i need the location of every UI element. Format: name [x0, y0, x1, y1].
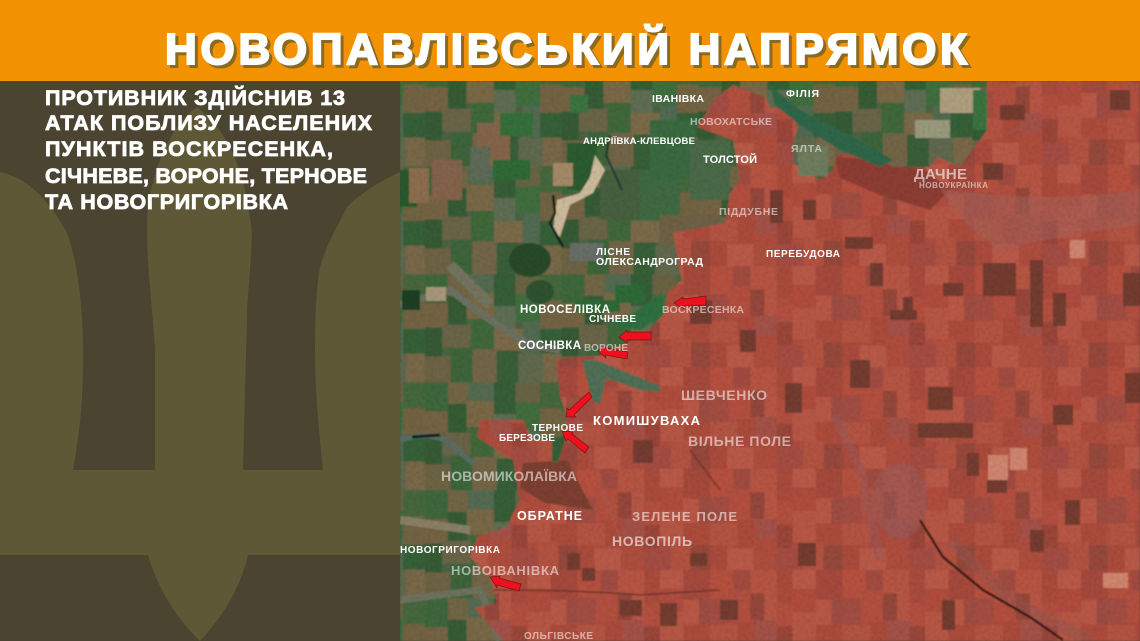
label: Толстой: ТОЛСТОЙ	[703, 153, 757, 166]
label: Березове: БЕРЕЗОВЕ	[499, 433, 555, 444]
text block: attack summary	[45, 85, 373, 214]
label: Філія: ФІЛІЯ	[786, 88, 819, 100]
label: Новоукраїнка: НОВОУКРАЇНКА	[919, 181, 988, 190]
text block: attack summary: ПРОТИВНИК ЗДІЙСНИВ 13	[45, 85, 345, 110]
label: Олександроград: ОЛЕКСАНДРОГРАД	[596, 256, 704, 268]
label: Соснівка: СОСНІВКА	[518, 340, 581, 352]
map imagery	[400, 81, 1140, 641]
label: Новоіванівка: НОВОІВАНІВКА	[451, 563, 560, 578]
arrow: Voskresenka	[674, 296, 706, 309]
satellite map	[400, 81, 1140, 641]
label: Дачне: ДАЧНЕ	[914, 166, 967, 183]
text block: attack summary: СІЧНЕВЕ, ВОРОНЕ, ТЕРНОВЕ	[45, 164, 367, 188]
label: Тернове: ТЕРНОВЕ	[532, 423, 583, 434]
label: Новомиколаївка: НОВОМИКОЛАЇВКА	[441, 468, 577, 484]
label: Перебудова: ПЕРЕБУДОВА	[766, 249, 840, 260]
label: Іванівка: ІВАНІВКА	[652, 93, 704, 105]
text block: attack summary: ПУНКТІВ ВОСКРЕСЕНКА,	[45, 137, 333, 161]
label: Новоселівка: НОВОСЕЛІВКА	[520, 304, 610, 316]
label: Ялта: ЯЛТА	[791, 143, 822, 155]
arrow: Ternove south	[562, 431, 589, 453]
text block: attack summary: АТАК ПОБЛИЗУ НАСЕЛЕНИХ	[45, 111, 373, 135]
label: Зелене Поле: ЗЕЛЕНЕ ПОЛЕ	[632, 509, 737, 524]
label: Андріївка-Клевцове: АНДРІЇВКА-КЛЕВЦОВЕ	[583, 136, 695, 147]
label: Новопіль: НОВОПІЛЬ	[612, 533, 692, 549]
label: Вільне Поле: ВІЛЬНЕ ПОЛЕ	[688, 433, 791, 449]
title: НОВОПАВЛІВСЬКИЙ НАПРЯМОК	[165, 23, 967, 74]
label: Вороне: ВОРОНЕ	[584, 343, 628, 354]
occupied territory red overlay	[400, 81, 1140, 641]
title: НОВОПАВЛІВСЬКИЙ НАПРЯМОК	[168, 26, 970, 77]
arrow: Vorone	[598, 346, 628, 359]
header banner	[0, 0, 1140, 81]
label: Новогригорівка: НОВОГРИГОРІВКА	[400, 545, 500, 556]
arrow: Sichneve	[619, 330, 651, 343]
label: Воскресенка: ВОСКРЕСЕНКА	[662, 304, 744, 316]
label: Новохатське: НОВОХАТСЬКЕ	[690, 116, 772, 128]
text block: attack summary: ТА НОВОГРИГОРІВКА	[45, 190, 288, 214]
label: Комишуваха: КОМИШУВАХА	[593, 413, 701, 428]
arrow: Ternove north	[566, 392, 592, 417]
label: Січневе: СІЧНЕВЕ	[589, 314, 636, 325]
label: Обратне: ОБРАТНЕ	[517, 509, 582, 523]
label: Піддубне: ПІДДУБНЕ	[719, 206, 778, 218]
label: Шевченко: ШЕВЧЕНКО	[681, 387, 767, 403]
arrow: Novohryhorivka	[490, 576, 521, 591]
label: Лісне: ЛІСНЕ	[596, 247, 630, 258]
left panel: trident emblem	[0, 107, 400, 641]
unoccupied green corridor and northern fields	[582, 360, 660, 405]
